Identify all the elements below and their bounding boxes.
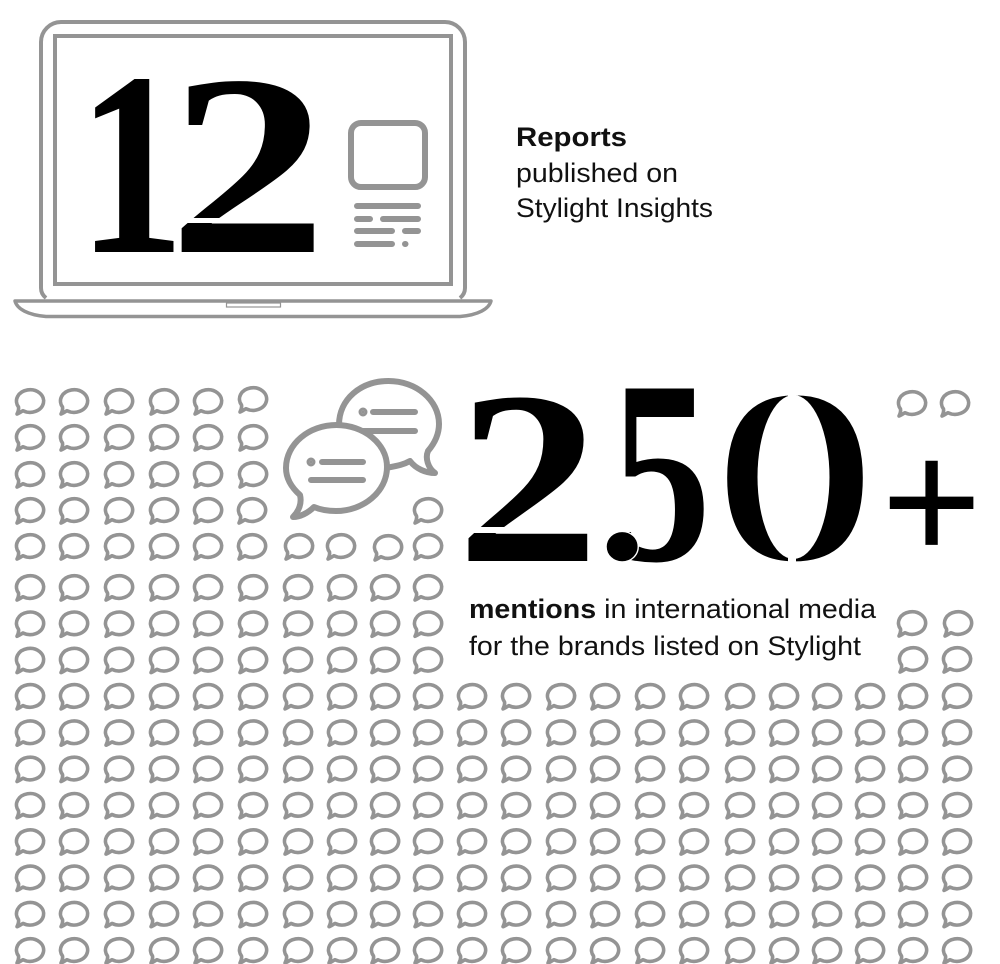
text: reports caption bbox=[516, 122, 713, 223]
laptop screen bbox=[55, 36, 451, 284]
bubble rows: ten column block bbox=[16, 576, 442, 673]
digits: 2 bbox=[456, 341, 600, 615]
back speech bubble bbox=[339, 381, 439, 473]
laptop base bbox=[15, 301, 491, 316]
laptop lid bbox=[41, 22, 465, 298]
bubble grid bbox=[16, 388, 972, 963]
bubble rows: upper left block bbox=[16, 388, 442, 560]
digits bbox=[456, 327, 875, 617]
icon: conversation bubbles bbox=[286, 381, 439, 517]
icon: laptop bbox=[15, 22, 491, 316]
big number: 250+ bbox=[456, 327, 982, 617]
plus sign: + bbox=[881, 405, 982, 597]
bubbles: right of number bbox=[898, 392, 972, 672]
digits 1 and 2 bbox=[78, 18, 327, 309]
article text lines bbox=[357, 206, 418, 244]
text: reports caption: Stylight Insights bbox=[516, 193, 713, 223]
text: mentions caption: mentions in international media bbox=[469, 594, 877, 624]
icon: article bbox=[351, 123, 425, 244]
text: reports caption: Reports bbox=[516, 122, 627, 152]
laptop notch bbox=[226, 303, 280, 307]
digits 1 and 2: 1 bbox=[78, 18, 184, 309]
text: mentions caption: for the brands listed on Stylight bbox=[469, 631, 862, 661]
text: reports caption: published on bbox=[516, 158, 678, 188]
decimal-style dot: . bbox=[598, 399, 646, 599]
digits 1 and 2: 2 bbox=[168, 22, 327, 308]
big number: 12 bbox=[78, 18, 327, 309]
text: mentions caption bbox=[469, 594, 877, 661]
digits: 0 bbox=[715, 340, 875, 612]
article image frame bbox=[351, 123, 425, 187]
digits: 5 bbox=[611, 327, 711, 617]
front speech bubble bbox=[286, 425, 387, 517]
bubble rows: full width block bbox=[16, 685, 971, 963]
